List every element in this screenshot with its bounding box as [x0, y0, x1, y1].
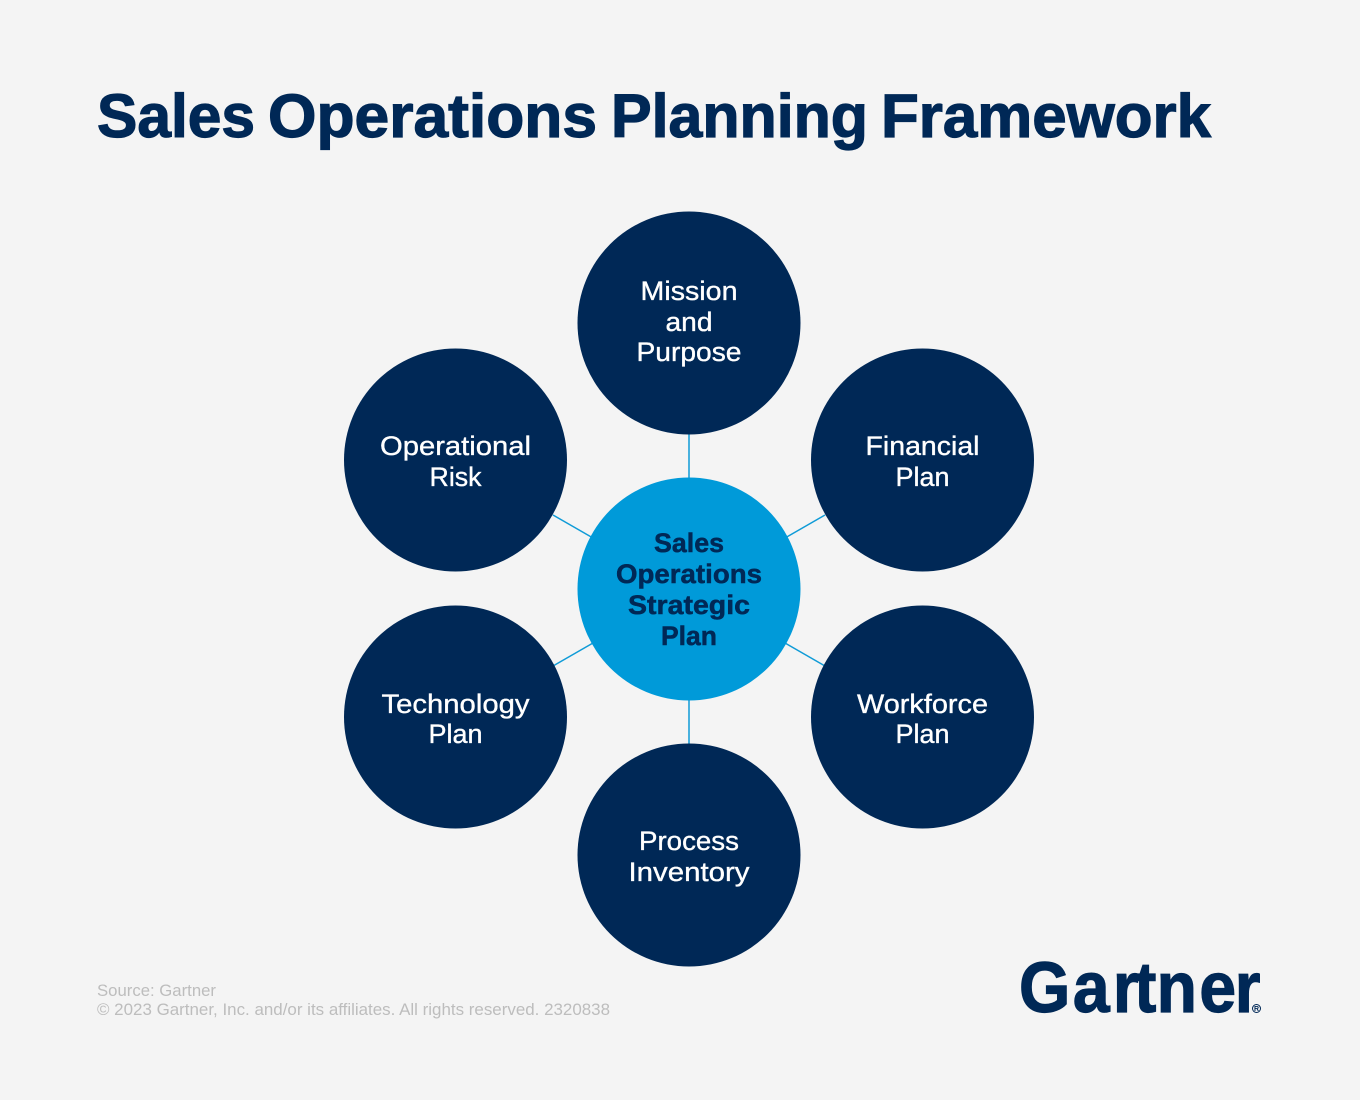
- node: process inventory: Process: [639, 826, 739, 856]
- center node: sales operations strategic plan: [578, 478, 800, 700]
- node: technology plan: Plan: [428, 719, 482, 749]
- source note: © 2023 Gartner, Inc. and/or its affiliates. All rights reserved. 2320838: [97, 1000, 610, 1019]
- node: mission and purpose: [578, 212, 800, 434]
- center node: sales operations strategic plan: Operations: [616, 559, 762, 589]
- node: workforce plan: Plan: [896, 719, 950, 749]
- source note: Source: Gartner: [97, 981, 216, 1000]
- node: process inventory: Inventory: [628, 857, 750, 887]
- center node: sales operations strategic plan: Sales: [654, 528, 724, 558]
- node: technology plan: [344, 606, 567, 828]
- title: Operations: [268, 82, 597, 150]
- logo: Gartner: R: [1254, 1006, 1259, 1013]
- node: workforce plan: Workforce: [857, 689, 988, 719]
- center node: sales operations strategic plan: Strategic: [628, 590, 750, 620]
- node: financial plan: [811, 348, 1034, 572]
- node: process inventory: [578, 744, 800, 966]
- node: mission and purpose: Purpose: [636, 337, 742, 367]
- node: workforce plan: [811, 606, 1034, 828]
- node: mission and purpose: and: [666, 307, 712, 337]
- connector lines: [553, 434, 825, 744]
- logo: Gartner: Gartner: [1019, 948, 1260, 1028]
- node: financial plan: Financial: [866, 431, 980, 461]
- node: technology plan: Technology: [382, 689, 530, 719]
- node: financial plan: Plan: [896, 462, 950, 492]
- node: operational risk: Operational: [380, 431, 531, 461]
- node: operational risk: Risk: [430, 462, 482, 492]
- node: operational risk: [344, 348, 567, 572]
- node: mission and purpose: Mission: [640, 276, 738, 306]
- title: Sales: [97, 82, 255, 150]
- title: Framework: [881, 82, 1211, 150]
- source note: [97, 981, 610, 1019]
- center node: sales operations strategic plan: Plan: [661, 621, 717, 651]
- title: Planning: [611, 82, 868, 150]
- title: [97, 82, 1211, 150]
